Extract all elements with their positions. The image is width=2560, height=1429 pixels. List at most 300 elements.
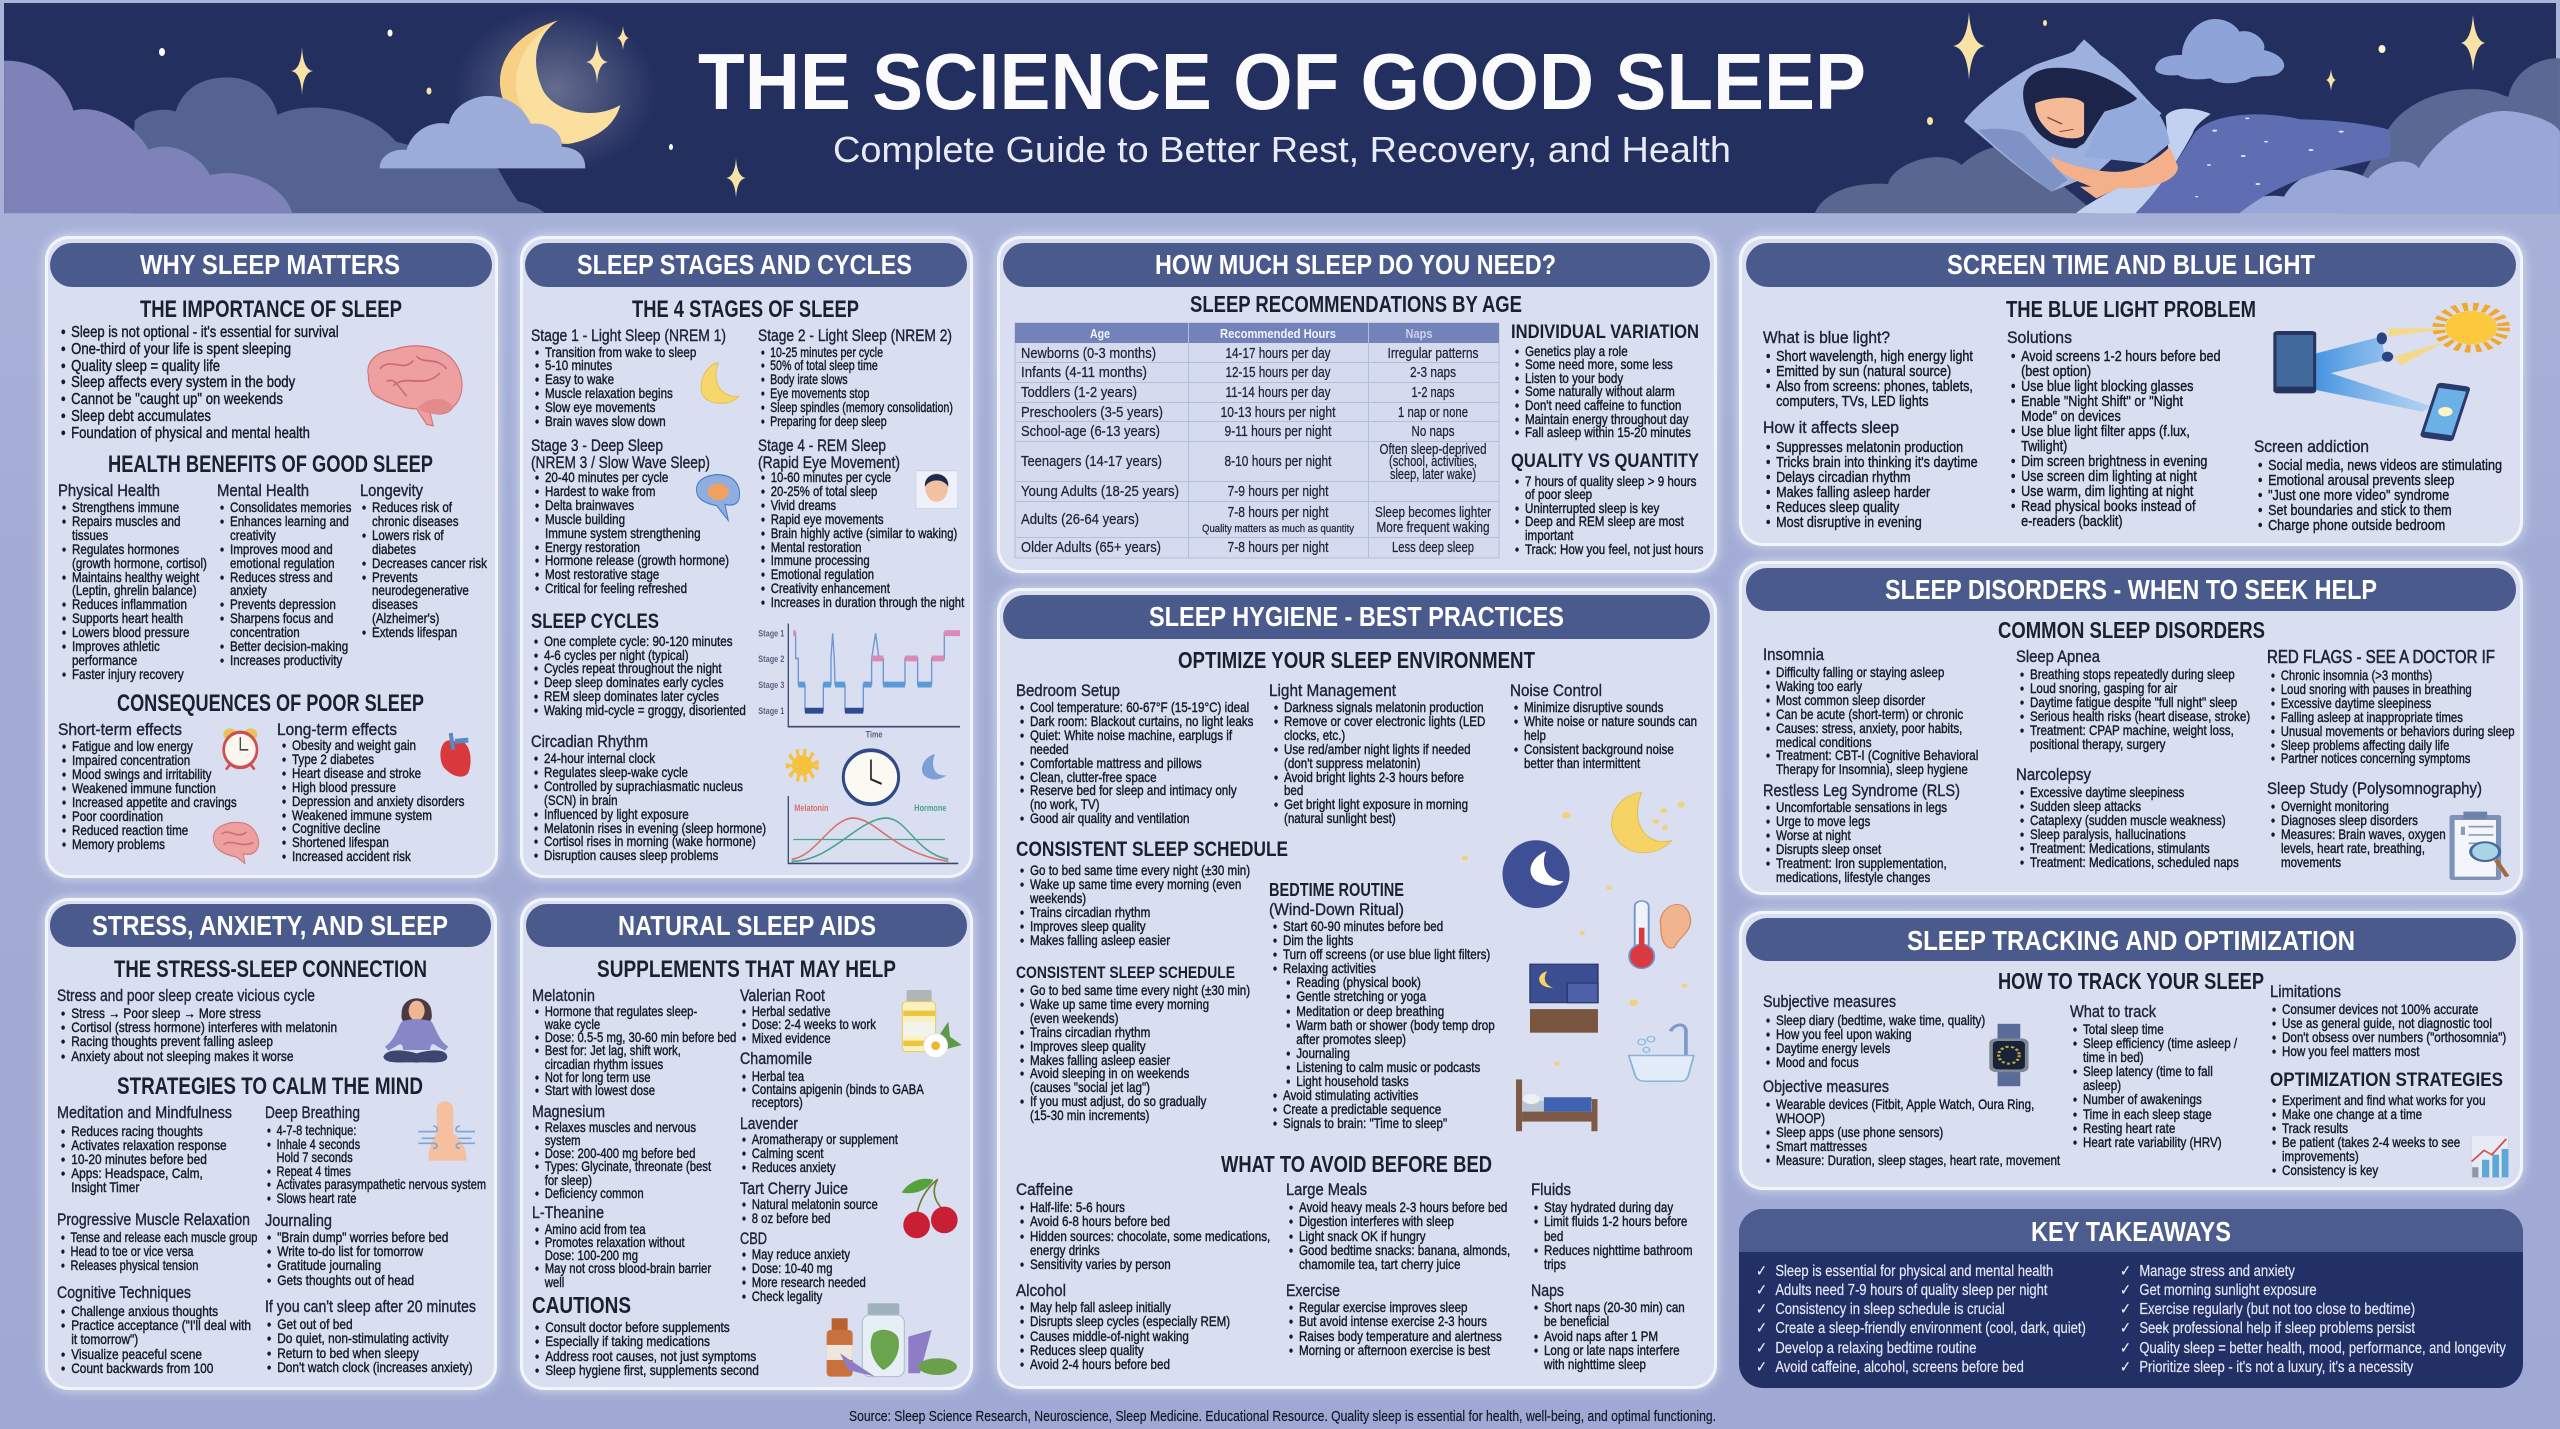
text block: consistent schedule detailed list [1020,982,1250,1124]
subheading: short-term effects: Short-term effects [58,720,182,739]
text block: physical health list: Repairs muscles and [72,513,180,529]
text block: longevity list: (Alzheimer's) [372,610,439,626]
panel: why sleep matters [45,236,498,878]
text block: l-theanine list: May not cross blood-brain barrier [545,1260,711,1276]
text block: how it affects sleep list: Tricks brain into thinking it's daytime [1776,454,1978,470]
text block: objective measures list: Measure: Duration, sleep stages, heart rate, movement [1776,1152,2060,1168]
text block: stage 3 list: Muscle building [545,511,625,527]
text block: stage 4 list: Creativity enhancement [771,580,890,596]
subheading: physical health: Physical Health [58,481,160,500]
heading: the blue light problem: THE BLUE LIGHT PROBLEM [2006,296,2256,322]
text block: exercise list: Raises body temperature and alertness [1299,1328,1502,1344]
heading: bedtime routine: BEDTIME ROUTINE [1269,880,1404,900]
subheading: progressive muscle relaxation: Progressive Muscle Relaxation [57,1210,250,1229]
panel: screen time and blue light [1739,236,2523,546]
text block: caffeine list: energy drinks [1030,1242,1100,1258]
text block: mental health list: Better decision-making [230,638,348,654]
chart: melatonin and hormone curves: Melatonin [794,802,828,813]
text block: importance list: Sleep is not optional - it's essential for survival [71,324,339,341]
icon: bed [1516,1079,1597,1131]
text block: red flags list: Unusual movements or behaviors during sleep [2281,723,2515,739]
icon: herbal bottles [827,1303,957,1377]
text block: bedtime routine list: after promotes sleep) [1296,1031,1406,1047]
text block: naps list: with nighttime sleep [1544,1356,1646,1372]
text block: bedroom setup list [1020,699,1254,826]
chart: sleep stage hypnogram: Stage 1 [758,705,785,716]
text block: circadian rhythm list: Disruption causes sleep problems [544,847,718,863]
panel: sleep hygiene best practices [997,588,1717,1389]
text block: limitations list: Consumer devices not 100% accurate [2282,1001,2478,1017]
text block: journaling list: Gratitude journaling [277,1257,381,1273]
text block: stage 3 list: Energy restoration [545,539,640,555]
text block: meditation list: Reduces racing thoughts [71,1123,203,1139]
text block: individual variation list: Fall asleep within 15-20 minutes [1525,424,1691,440]
subheading: solutions: Solutions [2007,328,2072,347]
text block: physical health list: Supports heart health [72,610,183,626]
table: sleep recommendations: Young Adults (18-25 years) [1021,483,1179,500]
text block: consistent schedule detailed list: If you must adjust, do so gradually [1030,1093,1206,1109]
text block: can't sleep list: Don't watch clock (increases anxiety) [277,1359,473,1375]
illustration: left clouds and moon [4,7,657,213]
text block: chamomile list: receptors) [752,1094,803,1110]
icon: cherries [902,1179,958,1238]
subheading: large meals: Large Meals [1286,1180,1367,1199]
text block: consistent schedule detailed list: Avoid sleeping in on weekends [1030,1065,1189,1081]
table: sleep recommendations: Newborns (0-3 months) [1021,345,1156,362]
text block: l-theanine list: Amino acid from tea [545,1220,646,1236]
text block: sleep apnea list: Loud snoring, gasping for air [2030,680,2177,696]
text block: chamomile list: Herbal tea [752,1068,804,1084]
subheading: melatonin: Melatonin [532,986,595,1005]
text block: consistent schedule list: Makes falling asleep easier [1030,932,1170,948]
text block: restless leg list: Worse at night [1776,827,1851,843]
text block: sleep study list [2271,800,2446,870]
text block: bedtime routine list: Create a predictable sequence [1283,1101,1441,1117]
text block: physical health list: Reduces inflammation [72,596,187,612]
text block: solutions list: Enable "Night Shift" or "Night [2021,392,2183,410]
text block: can't sleep list [267,1316,473,1376]
text block: solutions list: Use warm, dim lighting at night [2021,482,2193,500]
heading: health benefits: HEALTH BENEFITS OF GOOD SLEEP [108,451,433,478]
heading: common sleep disorders: COMMON SLEEP DISORDERS [1998,617,2265,643]
text block: physical health list: (Leptin, ghrelin balance) [72,582,197,598]
icon: crescent moon [701,363,739,403]
panel header: key takeaways: KEY TAKEAWAYS [2031,1216,2231,1247]
text block: narcolepsy list: Cataplexy (sudden muscle weakness) [2030,812,2226,828]
subheading: magnesium: Magnesium [532,1102,605,1121]
text block: light management list: (natural sunlight best) [1284,810,1396,826]
text block: stage 3 list [535,469,729,596]
text block: sleep cycles list: One complete cycle: 90-120 minutes [544,633,733,649]
text block: objective measures list: WHOOP) [1776,1110,1825,1126]
text block: how it affects sleep list: Most disruptive in evening [1776,514,1922,530]
text block: light management list: Use red/amber night lights if needed [1284,741,1471,757]
text block: physical health list: (growth hormone, cortisol) [72,555,207,571]
text block: magnesium list: for sleep) [545,1172,592,1188]
subheading: l-theanine: L-Theanine [532,1203,604,1222]
text block: narcolepsy list: Treatment: Medications, stimulants [2030,840,2210,856]
icon: heart [440,733,471,777]
subheading: narcolepsy: Narcolepsy [2016,765,2091,784]
text block: mental health list: Enhances learning and [230,513,349,529]
text block: bedroom setup list: Quiet: White noise machine, earplugs if [1030,727,1232,743]
text block: fluids list: bed [1544,1228,1563,1244]
text block: stage 2 list: Preparing for deep sleep [770,413,887,429]
table: sleep recommendations: Adults (26-64 years) [1021,511,1139,528]
table: sleep recommendations: 7-9 hours per night [1228,483,1329,500]
text block: narcolepsy list: Sudden sleep attacks [2030,798,2141,814]
text block: bedtime routine list: Light household tasks [1296,1073,1409,1089]
text block: noise control list [1514,699,1697,771]
text block: mental health list: anxiety [230,582,267,598]
text block: takeaways left column: Consistency in sleep schedule is crucial [1775,1301,2005,1318]
text block: consistent schedule list: Trains circadian rhythm [1030,904,1150,920]
text block: sleep apnea list: Daytime fatigue despite "full night" sleep [2030,694,2237,710]
text block: insomnia list: Treatment: CBT-I (Cognitive Behavioral [1776,747,1978,763]
text block: short-term effects list: Weakened immune function [72,780,216,796]
text block: can't sleep list: Return to bed when sleepy [277,1345,419,1361]
text block: stage 4 list: Rapid eye movements [771,511,884,527]
subheading: exercise: Exercise [1286,1281,1340,1300]
table: sleep recommendations: Naps [1406,326,1432,341]
text block: circadian rhythm list: Regulates sleep-wake cycle [544,764,688,780]
panel header: why sleep matters: WHY SLEEP MATTERS [140,249,400,280]
text block: meditation list: Apps: Headspace, Calm, [71,1165,203,1181]
text block: tart cherry list: Natural melatonin source [752,1196,878,1212]
text block: optimization strategies list: Experiment and find what works for you [2282,1092,2485,1108]
text block: exercise list: Morning or afternoon exercise is best [1299,1342,1490,1358]
text block: muscle relaxation list: Releases physical tension [70,1257,198,1273]
illustration: sleeping woman and right clouds [1815,19,2560,213]
table: sleep recommendations: 1 nap or none [1398,404,1468,421]
text block: noise control list: White noise or nature sounds can [1524,713,1697,729]
heading: consistent sleep schedule repeated: CONSISTENT SLEEP SCHEDULE [1016,963,1235,982]
text block: light management list: Avoid bright lights 2-3 hours before [1284,769,1464,785]
text block: cognitive techniques list: Practice acceptance ("I'll deal with [71,1317,251,1333]
text block: muscle relaxation list: Head to toe or vice versa [70,1243,193,1259]
text block: chamomile list [742,1068,924,1110]
title: THE SCIENCE OF GOOD SLEEP [698,37,1866,126]
text block: consistent schedule detailed list: Go to bed same time every night (±30 min) [1030,982,1250,998]
icon: thermometer [1629,901,1654,968]
text block: quality vs quantity list: Track: How you feel, not just hours [1525,541,1703,557]
text block: stage 2 list: 50% of total sleep time [770,357,878,373]
text block: individual variation list [1515,342,1691,440]
text block: bedroom setup list: needed [1030,741,1069,757]
text block: light management list: Get bright light exposure in morning [1284,796,1468,812]
text block: short-term effects list: Impaired concentration [72,752,190,768]
text block: stress cycle list [61,1005,337,1064]
text block: bedtime routine list: Turn off screens (or use blue light filters) [1283,946,1490,962]
heading: the importance of sleep: THE IMPORTANCE OF SLEEP [140,296,402,323]
text block: restless leg list: Uncomfortable sensations in legs [1776,799,1947,815]
text block: sleep apnea list: Serious health risks (heart disease, stroke) [2030,708,2250,724]
text block: consistent schedule detailed list: (even weekends) [1030,1010,1118,1026]
text block: light management list: Darkness signals melatonin production [1284,699,1484,715]
subheading: insomnia: Insomnia [1763,645,1824,664]
text block: importance list: Quality sleep = quality life [71,358,220,375]
text block: consistent schedule detailed list: (15-30 min increments) [1030,1107,1149,1123]
text block: takeaways right column: Manage stress and anxiety [2139,1262,2295,1280]
table: sleep recommendations: 12-15 hours per day [1226,364,1331,381]
text block: insomnia list: Therapy for Insomnia), sleep hygiene [1776,761,1968,777]
subheading: circadian rhythm: Circadian Rhythm [531,732,648,751]
text block: takeaways right column: Seek professional help if sleep problems persist [2139,1320,2415,1337]
text block: insomnia list: Causes: stress, anxiety, poor habits, [1776,720,1962,736]
subheading: objective measures: Objective measures [1763,1077,1889,1096]
text block: sleep cycles list [534,633,746,718]
text block: sleep apnea list [2020,668,2250,751]
text block: meditation list: 10-20 minutes before bed [71,1151,207,1167]
icon: screens, eyes and sun with light beams [2273,307,2504,442]
text block: magnesium list: Dose: 200-400 mg before bed [545,1145,695,1161]
text block: optimization strategies list: Track results [2282,1120,2348,1136]
text block: noise control list: better than intermittent [1524,755,1640,771]
text block: long-term effects list: Heart disease and stroke [292,765,421,781]
text block: stage 4 list: 10-60 minutes per cycle [771,469,891,485]
text block: longevity list: chronic diseases [372,513,459,529]
text block: mental health list: creativity [230,527,276,543]
text block: light management list [1274,699,1485,826]
text block: physical health list [62,499,207,682]
text block: red flags list: Loud snoring with pauses in breathing [2281,681,2472,697]
text block: screen addiction list: "Just one more video" syndrome [2268,487,2449,504]
subheading: valerian root: Valerian Root [740,986,825,1005]
subheading: limitations: Limitations [2270,982,2341,1001]
text block: stage 4 list: Increases in duration through the night [771,594,964,610]
text block: valerian list: Herbal sedative [752,1002,831,1018]
text block: cbd list: May reduce anxiety [752,1246,850,1262]
table: sleep recommendations: Often sleep-deprived [1380,441,1486,458]
heading: strategies to calm the mind: STRATEGIES TO CALM THE MIND [117,1073,423,1100]
text block: alcohol list: Avoid 2-4 hours before bed [1030,1356,1170,1372]
text block: stage 3 list: Delta brainwaves [545,497,634,513]
text block: naps list [1534,1300,1685,1371]
subheading: stage 3 [531,436,710,472]
icon: brain [368,346,462,426]
text block: physical health list: Strengthens immune [72,499,179,515]
text block: what to track list: Sleep latency (time to fall [2083,1063,2213,1079]
text block: insomnia list: Most common sleep disorder [1776,692,1925,708]
text block: solutions list: (best option) [2021,362,2091,380]
text block: short-term effects list [62,738,237,852]
text block: what to track list: time in bed) [2083,1049,2144,1065]
text block: bedroom setup list: Comfortable mattress and pillows [1030,755,1202,771]
text block: cognitive techniques list [61,1303,251,1376]
text block: longevity list [362,499,488,640]
text block: melatonin list: Hormone that regulates sleep- [545,1002,697,1018]
text block: long-term effects list: Weakened immune system [292,807,432,823]
text block: solutions list: Use screen dim lighting at night [2021,468,2197,484]
text block: cautions list: Address root causes, not just symptoms [545,1348,756,1364]
text block: limitations list: Use as general guide, not diagnostic tool [2282,1015,2492,1031]
text block: circadian rhythm list: Cortisol rises in morning (wake hormone) [544,833,756,849]
text block: caffeine list [1020,1199,1270,1272]
text block: quality vs quantity list: important [1525,527,1573,543]
text block: takeaways right column: Exercise regularly (but not too close to bedtime) [2139,1301,2415,1318]
text block: l-theanine list: well [545,1274,564,1290]
text block: sleep cycles list: 4-6 cycles per night (typical) [544,646,689,662]
text block: sleep cycles list: REM sleep dominates later cycles [544,688,719,704]
text block: meditation list: Insight Timer [71,1179,139,1195]
text block: long-term effects list: Shortened lifespan [292,834,389,850]
text block: cautions list: Sleep hygiene first, supplements second [545,1362,759,1378]
text block: importance list: Sleep debt accumulates [71,408,211,425]
text block: sleep study list: Diagnoses sleep disorders [2281,812,2418,828]
heading: red flags: RED FLAGS - SEE A DOCTOR IF [2267,647,2495,667]
text block: solutions list: Avoid screens 1-2 hours before bed [2021,348,2220,364]
text block: mental health list: concentration [230,624,300,640]
text block: melatonin list: Start with lowest dose [545,1082,655,1098]
text block: stage 2 list: Sleep spindles (memory consolidation) [770,399,953,415]
text block: circadian rhythm list: Influenced by light exposure [544,806,689,822]
text block: insomnia list: Can be acute (short-term) or chronic [1776,706,1963,722]
heading: the 4 stages of sleep: THE 4 STAGES OF SLEEP [632,296,859,323]
text block: exercise list: But avoid intense exercise 2-3 hours [1299,1313,1487,1329]
text block: sleep cycles list: Waking mid-cycle = groggy, disoriented [544,702,746,718]
text block: magnesium list: Deficiency common [545,1185,644,1201]
subheading: light management: Light Management [1269,681,1396,700]
text block: consistent schedule list [1020,862,1250,948]
text block: sleep apnea list: Treatment: CPAP machine, weight loss, [2030,722,2234,738]
text block: limitations list: How you feel matters most [2282,1043,2420,1059]
text block: large meals list: chamomile tea, tart cherry juice [1299,1256,1460,1272]
subheading: what is blue light: What is blue light? [1763,328,1890,347]
text block: consistent schedule detailed list: Improves sleep quality [1030,1038,1146,1054]
text block: bedtime routine list: Gentle stretching or yoga [1296,988,1426,1004]
text block: physical health list: performance [72,652,137,668]
text block: cautions list [535,1319,759,1378]
text block: fluids list: Reduces nighttime bathroom [1544,1242,1693,1258]
table: sleep recommendations: Toddlers (1-2 years) [1021,384,1137,401]
table: sleep recommendations: 2-3 naps [1410,364,1456,381]
text block: valerian list: Dose: 2-4 weeks to work [752,1016,876,1032]
text block: takeaways left column: Create a sleep-friendly environment (cool, dark, quiet) [1775,1320,2086,1337]
text block: deep breathing list: Repeat 4 times [276,1163,351,1179]
text block: alcohol list: Reduces sleep quality [1030,1342,1144,1358]
text block: alcohol list [1020,1299,1230,1372]
text block: large meals list: Digestion interferes with sleep [1299,1213,1454,1229]
text block: melatonin list [535,1002,736,1098]
text block: sleep cycles list: Cycles repeat throughout the night [544,660,722,676]
text block: muscle relaxation list: Tense and release each muscle group [70,1229,257,1245]
table: sleep recommendations: Irregular patterns [1388,345,1478,362]
text block: optimization strategies list: Consistency is key [2282,1162,2378,1178]
text block: sleep study list: movements [2281,854,2341,870]
icon: yellow moon and stars [1462,792,1687,1066]
subheading: stage 4: Stage 4 - REM Sleep [758,436,886,455]
text block: how it affects sleep list: Reduces sleep quality [1776,498,1899,516]
text block: short-term effects list: Memory problems [72,836,165,852]
text block: individual variation list: Listen to your body [1525,370,1623,386]
text block: solutions list: Read physical books instead of [2021,498,2195,514]
text block: subjective measures list [1766,1013,1985,1069]
subheading: deep breathing: Deep Breathing [265,1103,360,1122]
subheading: cbd: CBD [740,1229,767,1248]
text block: subjective measures list: How you feel upon waking [1776,1026,1912,1042]
text block: restless leg list: Urge to move legs [1776,813,1870,829]
text block: screen addiction list: Set boundaries and stick to them [2268,502,2452,519]
text block: consistent schedule detailed list: Makes falling asleep easier [1030,1052,1170,1068]
text block: what is blue light list: Emitted by sun (natural source) [1776,362,1951,380]
text block: naps list: Short naps (20-30 min) can [1544,1299,1685,1315]
icon: alarm clock [223,728,257,770]
text block: consistent schedule list: weekends) [1030,890,1086,906]
text block: restless leg list: Disrupts sleep onset [1776,841,1881,857]
text block: lavender list: Aromatherapy or supplement [752,1131,898,1147]
text block: how it affects sleep list: Suppresses melatonin production [1776,438,1963,456]
text block: bedtime routine list: Listening to calm music or podcasts [1296,1059,1480,1075]
text block: longevity list: Decreases cancer risk [372,555,487,571]
panel: stress, anxiety, and sleep [45,898,497,1390]
text block: optimization strategies list: improvements) [2282,1148,2359,1164]
icon: ear [1660,904,1691,948]
text block: large meals list: Light snack OK if hungry [1299,1228,1426,1244]
text block: magnesium list: Types: Glycinate, threonate (best [545,1158,711,1174]
text block: importance list: Foundation of physical and mental health [71,425,310,442]
text block: takeaways left column: Sleep is essential for physical and mental health [1775,1262,2053,1280]
subheading: stage 4 [758,436,900,472]
text block: physical health list: Maintains healthy weight [72,569,199,585]
text block: what to track list: asleep) [2083,1077,2121,1093]
table: sleep recommendations: Recommended Hours [1220,326,1336,341]
text block: magnesium list: Relaxes muscles and nervous [545,1118,696,1134]
subheading: alcohol: Alcohol [1016,1281,1066,1300]
text block: circadian rhythm list: (SCN) in brain [544,792,618,808]
text block: what to track list [2073,1022,2237,1149]
table: sleep recommendations: Sleep becomes lighter [1375,504,1491,521]
text block: insomnia list: Waking too early [1776,678,1862,694]
text block: long-term effects list: Cognitive decline [292,820,380,836]
table: sleep recommendations: (school, activities, [1389,453,1477,470]
table: sleep recommendations: 9-11 hours per night [1224,423,1332,440]
subheading: sleep apnea: Sleep Apnea [2016,647,2100,666]
text block: physical health list: Improves athletic [72,638,160,654]
text block: individual variation list: Some need more, some less [1525,356,1673,372]
text block: stage 2 list: 10-25 minutes per cycle [770,344,883,360]
text block: insomnia list: Difficulty falling or staying asleep [1776,664,1944,680]
text block: narcolepsy list: Sleep paralysis, hallucinations [2030,826,2186,842]
text block: deep breathing list: 4-7-8 technique: [276,1122,356,1138]
icon: small brain [213,822,259,863]
text block: objective measures list [1766,1097,2060,1167]
text block: long-term effects list: Increased accident risk [292,848,411,864]
text block: solutions list: Mode" on devices [2021,408,2121,424]
heading: bedtime routine [1269,880,1404,919]
heading: consequences of poor sleep: CONSEQUENCES OF POOR SLEEP [117,690,424,717]
text block: individual variation list: Some naturally without alarm [1525,383,1675,399]
text block: can't sleep list: Do quiet, non-stimulating activity [277,1330,449,1346]
table: sleep recommendations: sleep, later wake) [1390,466,1476,483]
text block: light management list: clocks, etc.) [1284,727,1345,743]
subheading: stage 2: Stage 2 - Light Sleep (NREM 2) [758,326,952,345]
text block: naps list: Avoid naps after 1 PM [1544,1328,1658,1344]
text block: quality vs quantity list: Deep and REM sleep are most [1525,513,1684,529]
text block: what is blue light list: Short wavelength, high energy light [1776,348,1973,364]
text block: journaling list: Gets thoughts out of head [277,1272,414,1288]
subheading: noise control: Noise Control [1510,681,1602,700]
text block: solutions list [2011,348,2220,528]
icon: blue moon [922,754,947,779]
text block: melatonin list: circadian rhythm issues [545,1056,663,1072]
text block: fluids list: Limit fluids 1-2 hours before [1544,1213,1687,1229]
heading: how to track your sleep: HOW TO TRACK YOUR SLEEP [1998,968,2264,994]
text block: physical health list: Regulates hormones [72,541,179,557]
text block: stage 3 list: Immune system strengthening [545,525,701,541]
heading: sleep recommendations by age: SLEEP RECOMMENDATIONS BY AGE [1190,291,1522,317]
text block: stage 1 list: Brain waves slow down [545,413,666,429]
text block: tart cherry list: 8 oz before bed [752,1210,831,1226]
